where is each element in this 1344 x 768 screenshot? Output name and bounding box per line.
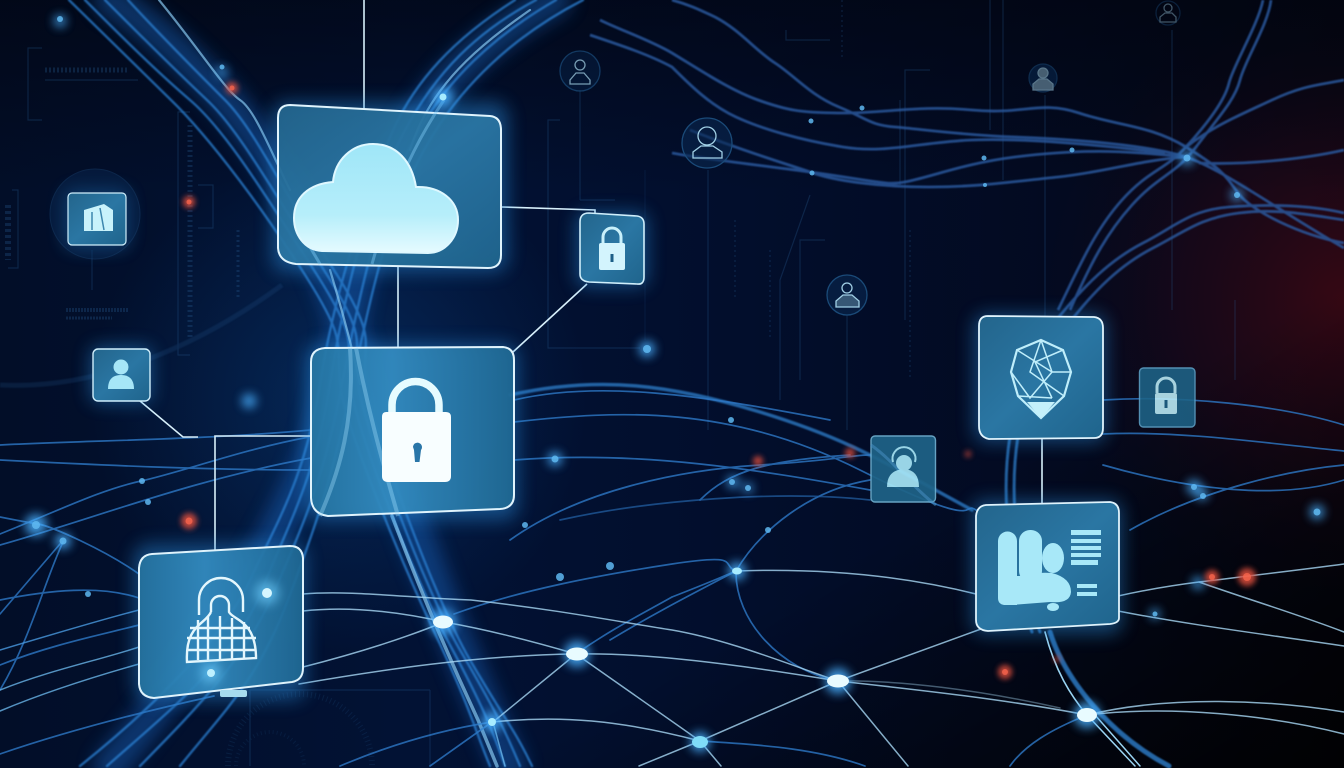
panel: shield (979, 316, 1103, 439)
icon: user faint (1029, 64, 1057, 92)
panel: mesh lock (139, 546, 303, 698)
icon: user (108, 360, 134, 389)
icon: cloud (294, 144, 458, 253)
panel: small lock right (1140, 368, 1195, 427)
icon: ID silhouette and lines (998, 530, 1101, 611)
strands inside cloud panel (300, 100, 444, 264)
light strands: left and right arcs through the centre (69, 0, 583, 766)
panel: main lock (311, 347, 514, 516)
connector lines (140, 0, 1042, 550)
icon: padlock (382, 381, 451, 482)
network lines: mid and lower web (0, 391, 1344, 766)
icon: lock (1155, 378, 1177, 414)
panel: ID card (976, 502, 1119, 631)
icon: lock (599, 228, 625, 270)
glow node inside panel (201, 581, 279, 683)
glow behind panels (65, 102, 1122, 700)
icon: user with headset (887, 447, 919, 487)
strands inside lock panel (320, 348, 398, 516)
icon: user centre (682, 118, 732, 168)
icon: building block (84, 204, 113, 231)
panel: user headset (871, 436, 936, 505)
icon: user faint top (1156, 1, 1180, 25)
panel: small lock top (580, 213, 644, 284)
panel: top-left badge (50, 169, 140, 259)
icon: user top (560, 51, 600, 91)
panel: user small (93, 349, 150, 401)
icon: shield globe (1011, 340, 1071, 418)
red glowing points (181, 82, 1256, 679)
strand across headset panel (871, 445, 936, 505)
strands: arc behind shield and ID panels (510, 384, 1169, 766)
round user icons (560, 1, 1180, 315)
panel: cloud (278, 100, 501, 268)
icon: user mid (827, 275, 867, 315)
icon: mesh padlock (187, 578, 256, 662)
strands: upper right wave bundle (590, 0, 1344, 322)
bright node cores (433, 94, 1097, 748)
